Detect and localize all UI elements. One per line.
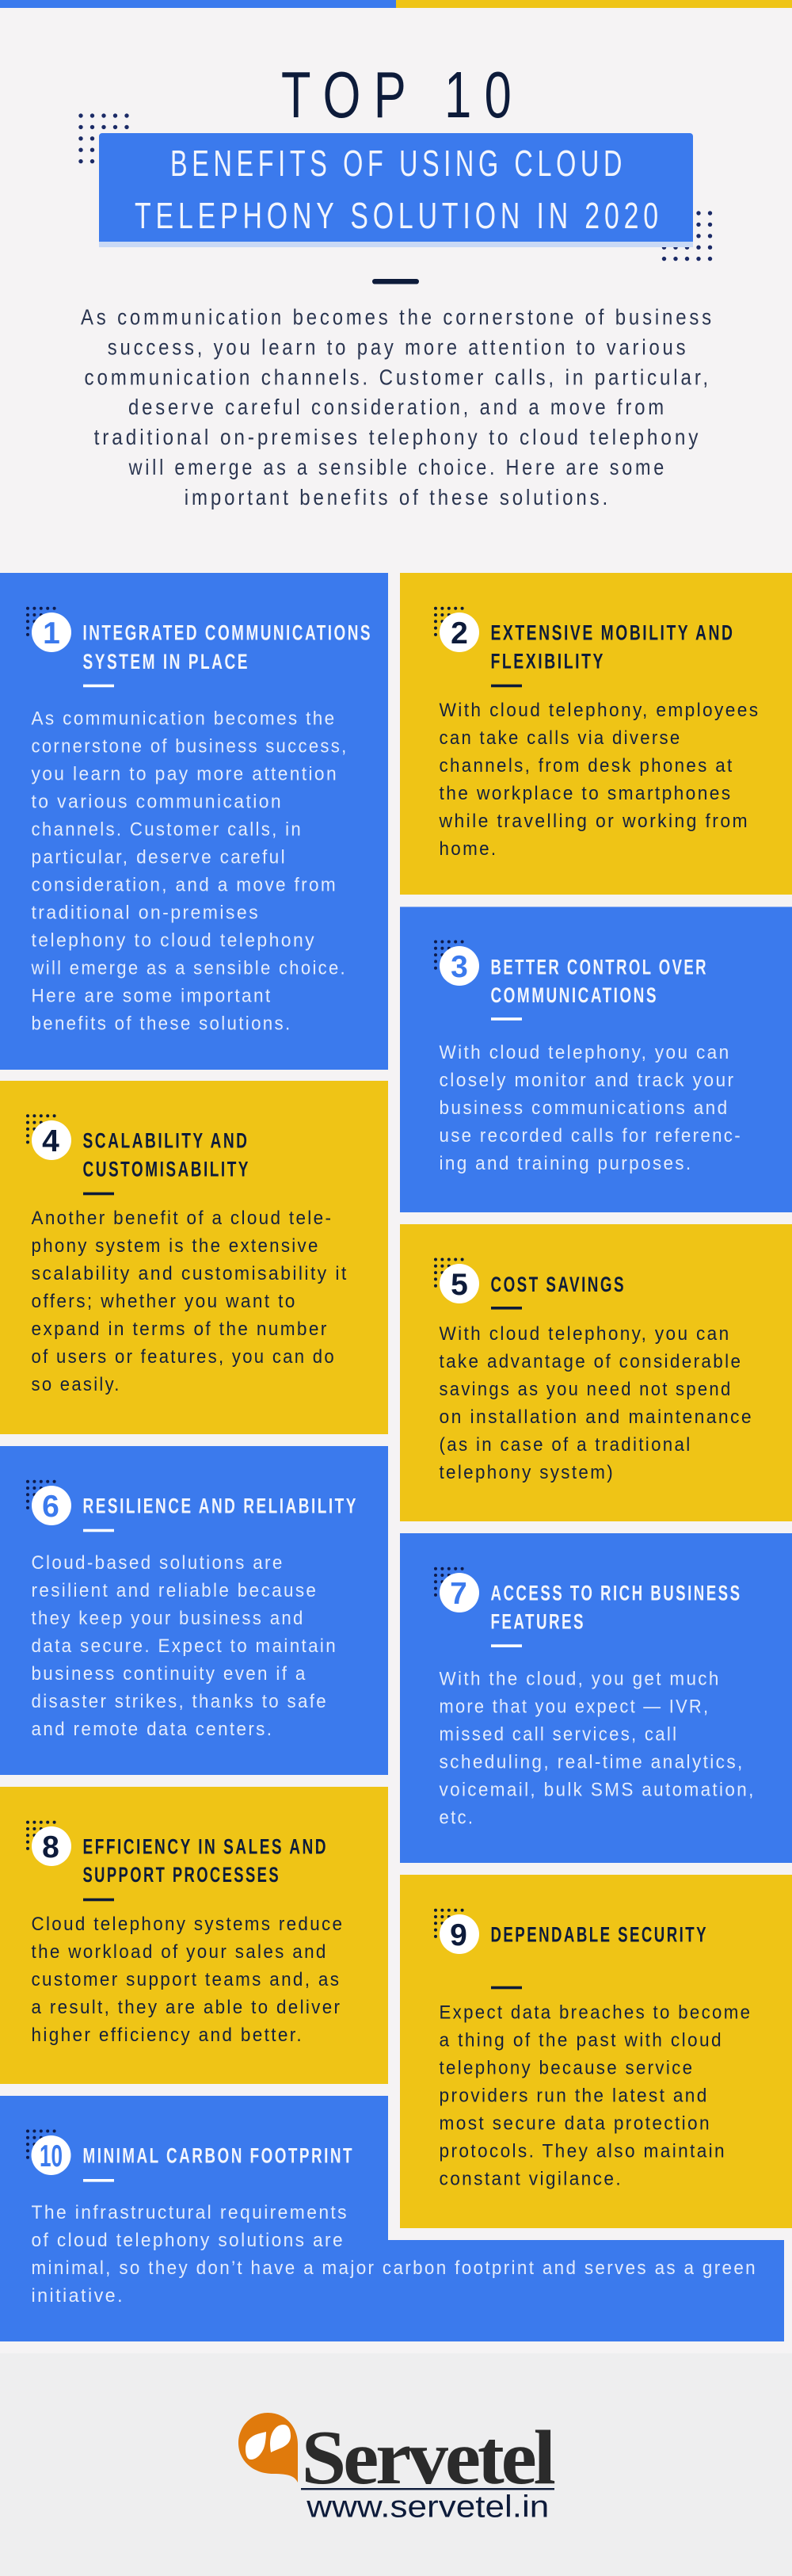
number badge 10: 10 — [40, 2139, 63, 2173]
panel 2: extensive mobility — [400, 573, 792, 895]
body 9 — [439, 2002, 752, 2189]
body 2: With cloud telephony, employees — [439, 700, 760, 721]
body 4: of users or features, you can do — [32, 1346, 336, 1368]
body 6: resilient and reliable because — [32, 1580, 318, 1601]
number badge 4: 4 — [42, 1124, 59, 1158]
heading 6: RESILIENCE AND RELIABILITY — [82, 1494, 358, 1517]
body 7: scheduling, real-time analytics, — [439, 1752, 744, 1773]
body 9: Expect data breaches to become — [439, 2002, 752, 2023]
body 6: Cloud-based solutions are — [32, 1552, 284, 1574]
body 2: channels, from desk phones at — [439, 755, 733, 777]
body 6: business continuity even if a — [32, 1663, 307, 1685]
body 3: use recorded calls for referenc- — [439, 1125, 742, 1147]
body 9: providers run the latest and — [439, 2085, 709, 2106]
body 8: a result, they are able to deliver — [32, 1997, 341, 2018]
body 9: a thing of the past with cloud — [439, 2029, 723, 2051]
heading 9: DEPENDABLE SECURITY — [491, 1922, 708, 1946]
body 5: (as in case of a traditional — [439, 1434, 692, 1456]
number badge 5: 5 — [451, 1268, 468, 1302]
panel 1: integrated communications — [0, 573, 388, 1070]
body 4: so easily. — [32, 1374, 121, 1395]
body 7: With the cloud, you get much — [439, 1669, 721, 1690]
body 4: Another benefit of a cloud tele- — [32, 1208, 333, 1229]
website url: www.servetel.in — [306, 2490, 549, 2524]
body 10: minimal, so they don’t have a major carbon footprint and serves as a green — [32, 2257, 757, 2279]
body 9: protocols. They also maintain — [439, 2140, 726, 2162]
body 7: missed call services, call — [439, 1724, 678, 1746]
body 8 — [32, 1914, 344, 2046]
body 5: savings as you need not spend — [439, 1379, 732, 1400]
intro paragraph — [81, 304, 714, 509]
intro paragraph: success, you learn to pay more attention to various — [108, 334, 688, 359]
number badge 8 — [32, 1826, 71, 1866]
wordmark: Servetel — [302, 2415, 555, 2501]
body 5: take advantage of considerable — [439, 1351, 742, 1372]
panel 6: resilience — [0, 1446, 388, 1775]
icon: orange speech bubble — [238, 2413, 298, 2483]
intro paragraph: will emerge as a sensible choice. Here are some — [128, 455, 667, 479]
heading 1 — [82, 621, 372, 674]
panel 5: cost savings — [400, 1224, 792, 1521]
heading 10: MINIMAL CARBON FOOTPRINT — [82, 2144, 354, 2168]
body 6: data secure. Expect to maintain — [32, 1635, 337, 1657]
number badge 1 — [32, 613, 71, 652]
body 1: cornerstone of business success, — [32, 735, 348, 758]
heading 4: CUSTOMISABILITY — [82, 1157, 250, 1181]
body 10: The infrastructural requirements — [32, 2202, 348, 2223]
intro paragraph: communication channels. Customer calls, in particular, — [84, 364, 711, 389]
body 9: constant vigilance. — [439, 2168, 623, 2189]
number badge 5 — [440, 1264, 479, 1303]
intro paragraph: deserve careful consideration, and a move from — [128, 395, 667, 419]
dash divider — [372, 279, 419, 284]
heading 3: COMMUNICATIONS — [491, 983, 658, 1007]
body 1: channels. Customer calls, in — [32, 819, 303, 840]
heading 4: SCALABILITY AND — [82, 1128, 249, 1152]
body 8: Cloud telephony systems reduce — [32, 1914, 344, 1935]
body 1: benefits of these solutions. — [32, 1013, 291, 1035]
body 5: on installation and maintenance — [439, 1406, 753, 1428]
body 1: will emerge as a sensible choice. — [31, 957, 347, 979]
body 2: the workplace to smartphones — [439, 783, 732, 804]
panel 9: dependable security — [400, 1875, 792, 2228]
intro paragraph: important benefits of these solutions. — [185, 485, 611, 509]
body 1: you learn to pay more attention — [32, 764, 338, 784]
body 3: business communications and — [439, 1097, 729, 1119]
heading 8: SUPPORT PROCESSES — [82, 1863, 280, 1887]
number badge 1: 1 — [43, 616, 60, 651]
number badge 8: 8 — [42, 1830, 59, 1864]
body 6: they keep your business and — [32, 1608, 305, 1629]
body 8: higher efficiency and better. — [32, 2025, 303, 2046]
logo: Servetel — [238, 2413, 555, 2524]
body 2 — [439, 700, 760, 860]
heading 7 — [491, 1581, 741, 1633]
body 7: etc. — [439, 1807, 474, 1829]
heading 2: FLEXIBILITY — [491, 650, 605, 674]
title: TOP 10: TOP 10 — [281, 58, 524, 132]
panel 3: better control — [400, 906, 792, 1212]
number badge 7 — [440, 1573, 479, 1612]
number badge 6: 6 — [42, 1490, 59, 1524]
number badge 4 — [32, 1120, 71, 1160]
number badge 3 — [440, 946, 479, 986]
body 4: expand in terms of the number — [32, 1319, 329, 1340]
body 4: phony system is the extensive — [32, 1235, 320, 1257]
body 8: the workload of your sales and — [32, 1941, 328, 1963]
panel 7: rich business features — [400, 1533, 792, 1863]
body 5 — [439, 1323, 753, 1483]
body 5: telephony system) — [439, 1462, 615, 1483]
heading 5: COST SAVINGS — [491, 1273, 626, 1296]
body 3: closely monitor and track your — [439, 1070, 735, 1091]
body 6: disaster strikes, thanks to safe — [32, 1691, 328, 1712]
body 1: traditional on-premises — [32, 902, 260, 924]
number badge 3: 3 — [451, 950, 468, 984]
number badge 9 — [440, 1914, 479, 1954]
heading 2 — [491, 621, 735, 674]
body 7: more that you expect — IVR, — [439, 1696, 710, 1718]
heading 3 — [491, 955, 708, 1007]
body 1: telephony to cloud telephony — [32, 930, 316, 951]
body 3 — [439, 1042, 742, 1174]
number badge 7: 7 — [450, 1577, 467, 1611]
heading 4 — [82, 1128, 250, 1181]
number badge 2: 2 — [451, 616, 468, 651]
body 10 — [32, 2202, 757, 2307]
body 10: initiative. — [32, 2285, 124, 2307]
heading 8: EFFICIENCY IN SALES AND — [82, 1834, 328, 1858]
body 4: offers; whether you want to — [32, 1291, 297, 1312]
body 1: to various communication — [32, 791, 283, 813]
body 1: As communication becomes the — [32, 708, 336, 729]
heading 7: FEATURES — [491, 1609, 585, 1633]
number badge 9: 9 — [450, 1918, 467, 1952]
body 9: most secure data protection — [439, 2112, 711, 2134]
body 7 — [439, 1669, 756, 1829]
body 4: scalability and customisability it — [32, 1263, 348, 1284]
body 1: particular, deserve careful — [32, 846, 287, 868]
body 2: while travelling or working from — [439, 811, 749, 832]
body 1: consideration, and a move from — [32, 875, 337, 895]
intro paragraph: traditional on-premises telephony to cloud telephony — [94, 425, 701, 449]
body 1: Here are some important — [32, 986, 272, 1006]
body 6 — [32, 1552, 337, 1740]
panel 4: scalability — [0, 1081, 388, 1434]
body 2: home. — [439, 838, 497, 860]
body 3: ing and training purposes. — [439, 1153, 692, 1174]
body 3: With cloud telephony, you can — [439, 1042, 730, 1063]
heading 1: INTEGRATED COMMUNICATIONS — [82, 621, 372, 645]
body 7: voicemail, bulk SMS automation, — [439, 1780, 756, 1801]
body 2: can take calls via diverse — [439, 727, 681, 749]
panel 10: minimal carbon footprint — [0, 2096, 784, 2341]
heading 8 — [82, 1834, 328, 1887]
number badge 6 — [32, 1486, 71, 1525]
footer band — [0, 2353, 792, 2576]
panel 8: efficiency — [0, 1787, 388, 2084]
body 10: of cloud telephony solutions are — [32, 2230, 345, 2251]
number badge 10 — [32, 2135, 71, 2175]
body 8: customer support teams and, as — [32, 1969, 341, 1990]
heading 1: SYSTEM IN PLACE — [82, 650, 249, 674]
number badge 2 — [440, 613, 479, 652]
body 4 — [32, 1208, 348, 1395]
body 5: With cloud telephony, you can — [439, 1323, 730, 1345]
body 6: and remote data centers. — [32, 1719, 273, 1740]
body 9: telephony because service — [439, 2057, 694, 2078]
top colour bar — [0, 0, 792, 8]
heading banner — [78, 113, 712, 261]
body 1 — [31, 708, 348, 1035]
